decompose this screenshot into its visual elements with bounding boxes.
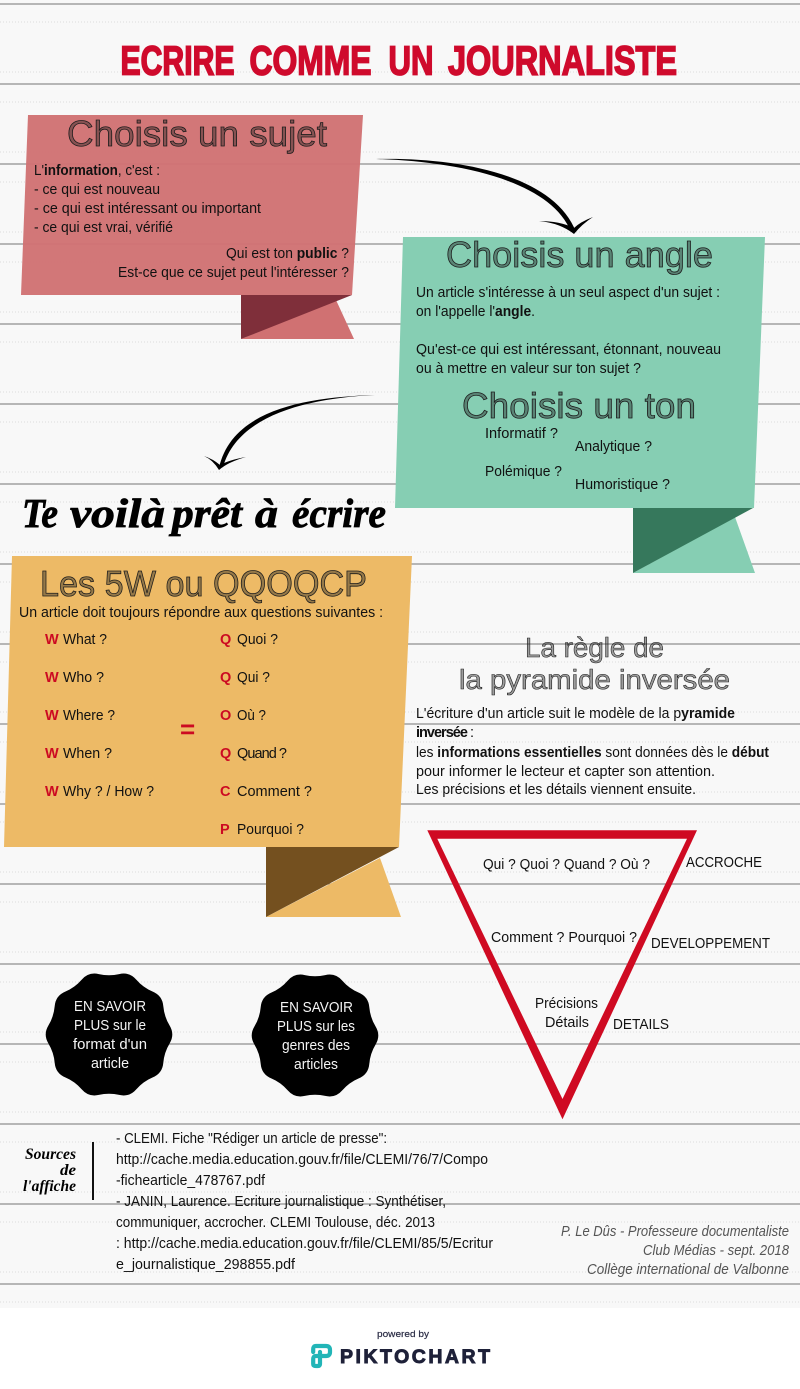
heading: te voila pret a ecrire: voilà (70, 490, 165, 536)
text: audience questions: Qui est ton public ? (226, 246, 349, 262)
title: ECRIRE (120, 38, 234, 84)
icon: piktochart mark (313, 1346, 330, 1366)
text: angle explanation: Qu'est-ce qui est intéressant, étonnant, nouveau (416, 342, 721, 358)
list: QQOQCP questions: Qui ? (237, 670, 270, 686)
list: 5W questions: W (45, 746, 59, 762)
footer: piktochart logo (313, 1329, 490, 1368)
text: pyramid explanation: les informations essentielles sont données dès le début (416, 745, 769, 761)
text: definition of information: - ce qui est vrai, vérifié (34, 220, 173, 236)
chart: inverted pyramid (427, 830, 770, 1119)
list: QQOQCP questions: Quand ? (237, 746, 287, 762)
badge: genres des articles (252, 975, 378, 1096)
list: QQOQCP questions: Q (220, 746, 231, 762)
pyramid level: developpement: DEVELOPPEMENT (651, 936, 770, 952)
text: pyramid explanation: pour informer le lecteur et capter son attention. (416, 764, 715, 780)
list: 5W questions: Where ? (63, 708, 115, 724)
triangle outline (427, 830, 697, 1119)
heading: te voila pret a ecrire: prêt (169, 490, 244, 536)
badge: genres des articles: genres des (282, 1038, 350, 1054)
pyramid level: developpement: Comment ? Pourquoi ? (491, 930, 637, 946)
pyramid level: accroche: ACCROCHE (686, 855, 762, 871)
label: sources de l'affiche: l'affiche (23, 1178, 76, 1195)
text: author credit: Collège international de Valbonne (587, 1262, 789, 1278)
list: 5W questions: W (45, 784, 59, 800)
text: references: : http://cache.media.education.gouv.fr/file/CLEMI/85/5/Ecritur (116, 1236, 493, 1252)
powered by: powered by (377, 1329, 429, 1340)
title (120, 38, 677, 84)
text: pyramid explanation: Les précisions et les détails viennent ensuite. (416, 782, 696, 798)
text: tones: Humoristique ? (575, 477, 670, 493)
label: sources de l'affiche: de (60, 1162, 76, 1179)
list: 5W questions: W (45, 670, 59, 686)
list: 5W questions: Why ? / How ? (63, 784, 154, 800)
arrow: angle to writing (204, 395, 375, 470)
text: definition of information: - ce qui est nouveau (34, 182, 160, 198)
heading: les 5W ou QQOQCP: Les 5W ou QQOQCP (40, 563, 367, 604)
list: 5W questions: What ? (63, 632, 107, 648)
ribbon tail: orange (266, 847, 401, 917)
title: UN (388, 38, 434, 84)
list: QQOQCP questions: P (220, 822, 230, 838)
label: sources de l'affiche: Sources (25, 1146, 76, 1163)
text: angle explanation (416, 285, 721, 377)
badge: format d'un article: article (91, 1056, 129, 1072)
badge: genres des articles: PLUS sur les (277, 1019, 355, 1035)
heading: te voila pret a ecrire (22, 490, 386, 536)
heading: te voila pret a ecrire: écrire (292, 490, 386, 536)
pyramid level: details: DETAILS (613, 1017, 669, 1033)
text: audience questions: Est-ce que ce sujet peut l'intéresser ? (118, 265, 349, 281)
list: 5W questions: When ? (63, 746, 112, 762)
badge: genres des articles: EN SAVOIR (280, 1000, 353, 1016)
list: QQOQCP questions (220, 632, 312, 838)
title: JOURNALISTE (448, 38, 677, 84)
text: pyramid explanation: L'écriture d'un article suit le modèle de la pyramide (416, 706, 735, 722)
list: QQOQCP questions: Pourquoi ? (237, 822, 304, 838)
text: tones: Analytique ? (575, 439, 652, 455)
text: pyramid explanation (416, 706, 769, 798)
heading: la regle de la pyramide inversee: la pyramide inversée (459, 664, 730, 695)
list: 5W questions: W (45, 708, 59, 724)
text: references: - CLEMI. Fiche "Rédiger un article de presse": (116, 1131, 387, 1147)
text: angle explanation: Un article s'intéresse à un seul aspect d'un sujet : (416, 285, 720, 301)
heading: choisis un ton: Choisis un ton (462, 385, 696, 426)
panel: les 5W (4, 556, 412, 917)
text: definition of information (34, 163, 261, 236)
heading: choisis un sujet: Choisis un sujet (67, 113, 327, 154)
list: QQOQCP questions: Comment ? (237, 784, 312, 800)
badge: format d'un article (46, 974, 172, 1095)
heading: la regle de la pyramide inversee: La règle de (525, 632, 664, 663)
pyramid level: details (535, 996, 669, 1033)
equals sign: = (180, 714, 195, 744)
heading: choisis un angle: Choisis un angle (446, 234, 713, 275)
text: angle explanation: on l'appelle l'angle. (416, 304, 535, 320)
pyramid level: details: Précisions (535, 996, 598, 1012)
text: references: -fichearticle_478767.pdf (116, 1173, 266, 1189)
list: QQOQCP questions: C (220, 784, 231, 800)
panel background: green (395, 237, 765, 508)
list: 5W questions: W (45, 632, 59, 648)
text: intro: Un article doit toujours répondre aux questions suivantes : (19, 605, 383, 621)
text: pyramid explanation: inversée : (416, 725, 474, 741)
label: sources de l'affiche (23, 1146, 76, 1195)
list: QQOQCP questions: O (220, 708, 231, 724)
text: definition of information: L'information, c'est : (34, 163, 160, 179)
pyramid level: accroche: Qui ? Quoi ? Quand ? Où ? (483, 857, 650, 873)
panel: choisis un angle (395, 234, 765, 573)
list: 5W questions (45, 632, 154, 800)
panel background: orange (4, 556, 412, 847)
text: author credit (561, 1224, 789, 1278)
pyramid level: accroche (483, 855, 762, 873)
text: references: communiquer, accrocher. CLEMI Toulouse, déc. 2013 (116, 1215, 435, 1231)
text: references: - JANIN, Laurence. Ecriture journalistique : Synthétiser, (116, 1194, 446, 1210)
ribbon tail: red (241, 295, 354, 339)
text: audience questions (118, 246, 349, 281)
heading: la regle de la pyramide inversee (459, 632, 730, 695)
list: QQOQCP questions: Où ? (237, 708, 266, 724)
list: QQOQCP questions: Q (220, 632, 231, 648)
heading: te voila pret a ecrire: Te (22, 490, 58, 536)
text: references: http://cache.media.education.gouv.fr/file/CLEMI/76/7/Compo (116, 1152, 488, 1168)
text: references: e_journalistique_298855.pdf (116, 1257, 296, 1273)
text: angle explanation: ou à mettre en valeur sur ton sujet ? (416, 361, 641, 377)
list: 5W questions: Who ? (63, 670, 104, 686)
arrow: sujet to angle (376, 159, 593, 234)
list: QQOQCP questions: Q (220, 670, 231, 686)
list: QQOQCP questions: Quoi ? (237, 632, 278, 648)
badge: genres des articles: articles (294, 1057, 338, 1073)
panel background: red (21, 115, 363, 295)
text: references (116, 1131, 493, 1273)
pyramid level: details: Détails (545, 1015, 589, 1031)
badge: format d'un article: format d'un (73, 1037, 147, 1053)
panel: choisis un sujet (21, 113, 363, 339)
text: definition of information: - ce qui est intéressant ou important (34, 201, 261, 217)
ribbon tail: green (633, 508, 755, 573)
badge: format d'un article: EN SAVOIR (74, 999, 146, 1015)
heading: te voila pret a ecrire: à (255, 490, 278, 536)
title: COMME (250, 38, 372, 84)
text: tones: Polémique ? (485, 464, 562, 480)
wordmark: PIKTOCHART (340, 1346, 490, 1368)
pyramid level: developpement (491, 930, 770, 952)
text: tones (485, 426, 670, 493)
text: author credit: Club Médias - sept. 2018 (643, 1243, 789, 1259)
text: tones: Informatif ? (485, 426, 558, 442)
badge: format d'un article: PLUS sur le (74, 1018, 146, 1034)
